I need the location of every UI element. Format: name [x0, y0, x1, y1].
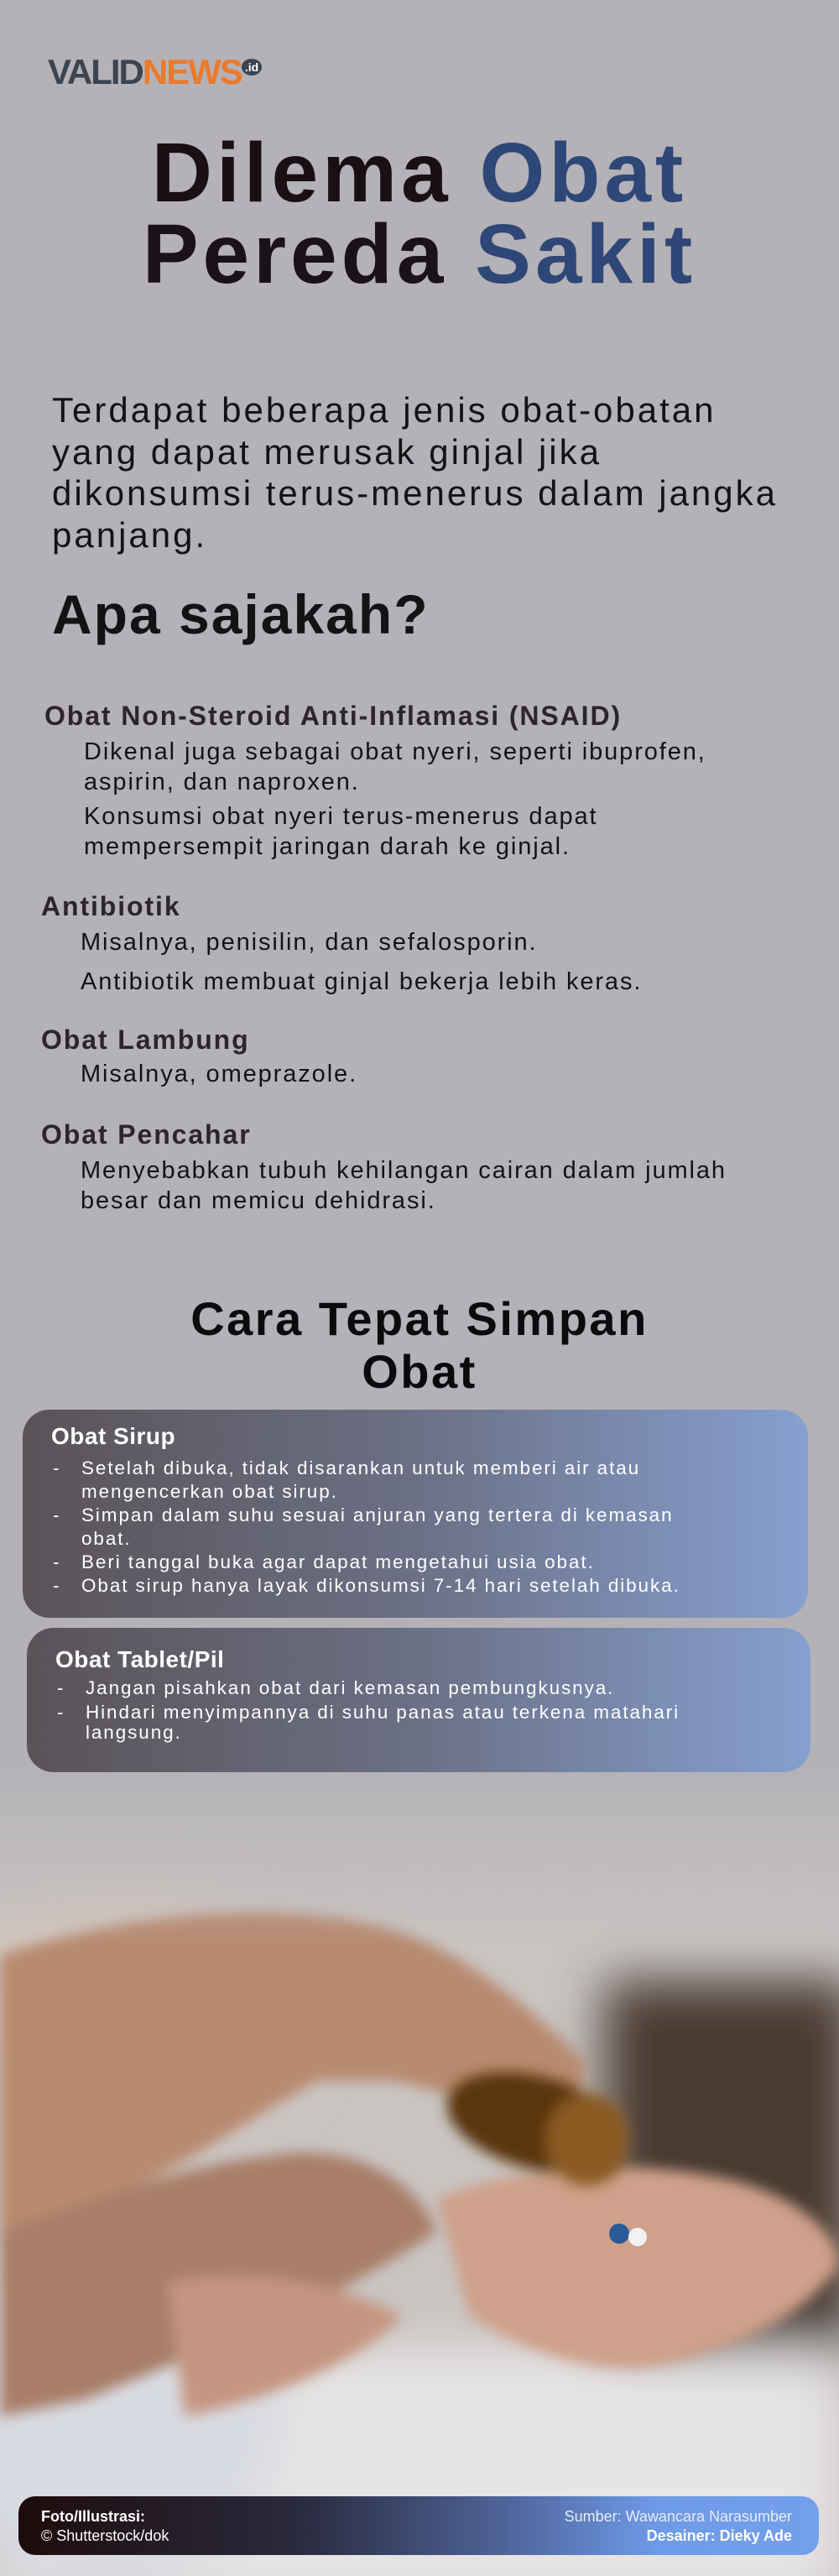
credit: photo: Foto/Illustrasi: — [41, 2508, 145, 2525]
card: Obat Sirup: Simpan dalam suhu sesuai anjuran yang tertera di kemasan — [81, 1504, 673, 1525]
title: Pereda Sakit — [143, 207, 696, 301]
intro text — [52, 390, 778, 554]
card: Obat Tablet/Pil: Jangan pisahkan obat dari kemasan pembungkusnya. — [86, 1677, 614, 1698]
item: Obat Lambung: Obat Lambung — [41, 1025, 250, 1055]
item: Obat Lambung: Misalnya, omeprazole. — [81, 1061, 357, 1087]
item: NSAID: Dikenal juga sebagai obat nyeri, seperti ibuprofen, — [84, 738, 706, 765]
photo: hands with pill bottle — [0, 1833, 839, 2576]
intro text: Terdapat beberapa jenis obat-obatan — [52, 390, 717, 430]
item: NSAID: aspirin, dan naproxen. — [84, 769, 360, 795]
item: NSAID: Obat Non-Steroid Anti-Inflamasi (NSAID) — [44, 701, 622, 731]
card: Obat Tablet/Pil — [27, 1628, 810, 1772]
logo: VALIDNEWS .id — [48, 52, 258, 91]
card: Obat Sirup: Obat sirup hanya layak dikonsumsi 7-14 hari setelah dibuka. — [81, 1575, 680, 1596]
item: NSAID — [44, 701, 706, 860]
title: Dilema Obat — [152, 126, 687, 220]
item: Obat Pencahar: besar dan memicu dehidrasi. — [81, 1187, 436, 1214]
card: Obat Sirup: obat. — [81, 1528, 132, 1549]
item: Obat Pencahar: Obat Pencahar — [41, 1119, 252, 1150]
heading: Cara Tepat Simpan Obat — [190, 1292, 649, 1398]
item: Antibiotik — [41, 891, 642, 995]
item: Obat Pencahar — [41, 1119, 727, 1214]
intro text: dikonsumsi terus-menerus dalam jangka — [52, 473, 778, 513]
item: Antibiotik: Antibiotik — [41, 891, 181, 921]
card: Obat Sirup: mengencerkan obat sirup. — [81, 1481, 338, 1502]
credit: source and designer: Sumber: Wawancara Narasumber — [565, 2508, 792, 2525]
item: Antibiotik: Antibiotik membuat ginjal bekerja lebih keras. — [81, 968, 642, 995]
heading: Apa sajakah: Apa sajakah? — [52, 583, 430, 645]
credit: photo — [41, 2508, 169, 2544]
credit: source and designer — [565, 2508, 792, 2544]
footer bar — [18, 2496, 819, 2555]
heading: Cara Tepat Simpan Obat: Obat — [362, 1345, 477, 1398]
card: Obat Tablet/Pil: Obat Tablet/Pil — [55, 1646, 224, 1672]
intro text: panjang. — [52, 515, 207, 554]
card: Obat Sirup — [23, 1410, 808, 1618]
credit: photo: © Shutterstock/dok — [41, 2527, 169, 2544]
intro text: yang dapat merusak ginjal jika — [52, 431, 602, 472]
item: Obat Lambung — [41, 1025, 357, 1087]
card: Obat Sirup: Beri tanggal buka agar dapat mengetahui usia obat. — [81, 1551, 595, 1572]
card: Obat Tablet/Pil: langsung. — [86, 1722, 182, 1743]
item: Obat Pencahar: Menyebabkan tubuh kehilangan cairan dalam jumlah — [81, 1157, 727, 1184]
item: Antibiotik: Misalnya, penisilin, dan sefalosporin. — [81, 929, 538, 956]
card: Obat Tablet/Pil: Hindari menyimpannya di suhu panas atau terkena matahari — [86, 1702, 680, 1723]
title — [143, 126, 696, 301]
credit: source and designer: Desainer: Dieky Ade — [647, 2527, 792, 2544]
card: Obat Sirup: Setelah dibuka, tidak disarankan untuk memberi air atau — [81, 1457, 640, 1478]
item: NSAID: mempersempit jaringan darah ke ginjal. — [84, 833, 571, 860]
heading: Cara Tepat Simpan Obat: Cara Tepat Simpan — [190, 1292, 649, 1345]
item: NSAID: Konsumsi obat nyeri terus-menerus dapat — [84, 803, 597, 830]
card: Obat Sirup: Obat Sirup — [51, 1423, 175, 1449]
